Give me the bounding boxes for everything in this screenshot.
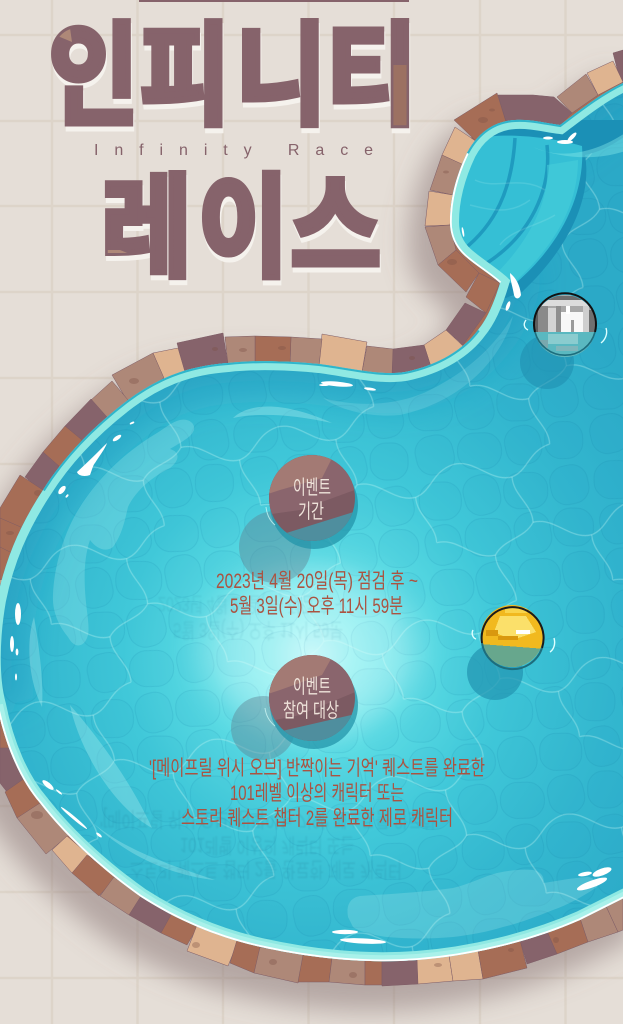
light veil: top crescents <box>233 316 513 423</box>
title white drop layer <box>49 20 418 296</box>
event target text <box>149 757 485 830</box>
gold coin outline <box>482 607 544 648</box>
event target text: '[메이프릴 위시 오브] 반짝이는 기억' 퀘스트를 완료한 <box>149 757 485 780</box>
title main lettering: 레이스 <box>101 167 381 291</box>
event period text: 2023년 4월 20일(목) 점검 후 ~ <box>216 570 418 593</box>
silver coin outline <box>534 293 596 332</box>
badge 2 water shadow <box>270 661 358 749</box>
icon: gold coin <box>467 604 555 700</box>
title <box>48 14 418 296</box>
event target text: 101레벨 이상의 캐릭터 또는 <box>230 782 404 805</box>
badge 2 label: 참여 대상 <box>283 699 339 722</box>
gold coin body <box>481 605 543 667</box>
silver coin body <box>535 295 595 357</box>
badge 2 ripple <box>265 708 275 726</box>
light veil: left crescent <box>53 420 194 645</box>
silver coin ripples <box>524 320 607 343</box>
event period text: 5월 3일(수) 오후 11시 59분 <box>230 595 403 618</box>
rim outer edge: top <box>43 75 623 490</box>
central light glow <box>200 570 420 730</box>
event target text: 스토리 퀘스트 챕터 2를 완료한 제로 캐릭터 <box>181 807 453 830</box>
reflected target text: '[메이프릴 위시 오브] 반짝이는 기억' 퀘스트를 완료한 <box>100 807 436 830</box>
silver coin shadow <box>520 335 574 389</box>
subtitle: Infinity Race <box>94 142 373 159</box>
reflected event period text: 5월 3일(수) 오후 11시 59분 <box>173 618 343 641</box>
deep water edge shading <box>0 75 623 705</box>
badge 2 ball <box>269 655 355 741</box>
title main lettering <box>48 15 417 291</box>
gold coin ripples <box>472 630 555 652</box>
badge 1 label: 이벤트 <box>293 476 331 499</box>
reflected target text: 101레벨 이상의 캐릭터 또는 <box>180 833 354 856</box>
badge 2 label: 이벤트 <box>293 675 331 698</box>
badge 1 ripple <box>266 507 275 525</box>
title main lettering: 인피니티 <box>48 15 417 139</box>
light veil: left spikes <box>29 617 215 880</box>
badge 2 label <box>283 675 339 722</box>
gold coin shadow <box>467 644 523 700</box>
title white drop layer: 인피니티 <box>49 20 418 144</box>
event period text <box>216 570 418 618</box>
upper right light veil <box>536 134 623 158</box>
rim outer edge: white <box>0 153 623 961</box>
reflected target text: 스토리 퀘스트 챕터 2를 완료한 제로 캐릭터 <box>130 857 402 880</box>
icon: silver coin <box>520 290 607 389</box>
event target badge <box>231 650 360 760</box>
title white drop layer: 레이스 <box>102 172 382 296</box>
pool steps basin <box>455 136 582 284</box>
rim inner line <box>0 705 623 961</box>
reflected target text <box>100 807 436 880</box>
title brick colour patches <box>60 29 406 253</box>
reflected event period text: 2023년 4월 20일(목) 점검 후 ~ <box>158 592 343 615</box>
badge 1 ball <box>269 455 355 541</box>
badge 1 label <box>293 476 331 523</box>
badge 2 floor shadow <box>231 696 295 760</box>
dark water band at top right <box>440 120 623 300</box>
badge 1 label: 기간 <box>298 500 324 523</box>
badge 1 water shadow <box>270 461 358 549</box>
water highlights <box>10 131 613 945</box>
reflected event period text <box>160 596 342 640</box>
event period badge <box>239 450 360 583</box>
badge 1 floor shadow <box>239 511 311 583</box>
light veil: bottom right <box>348 870 597 938</box>
